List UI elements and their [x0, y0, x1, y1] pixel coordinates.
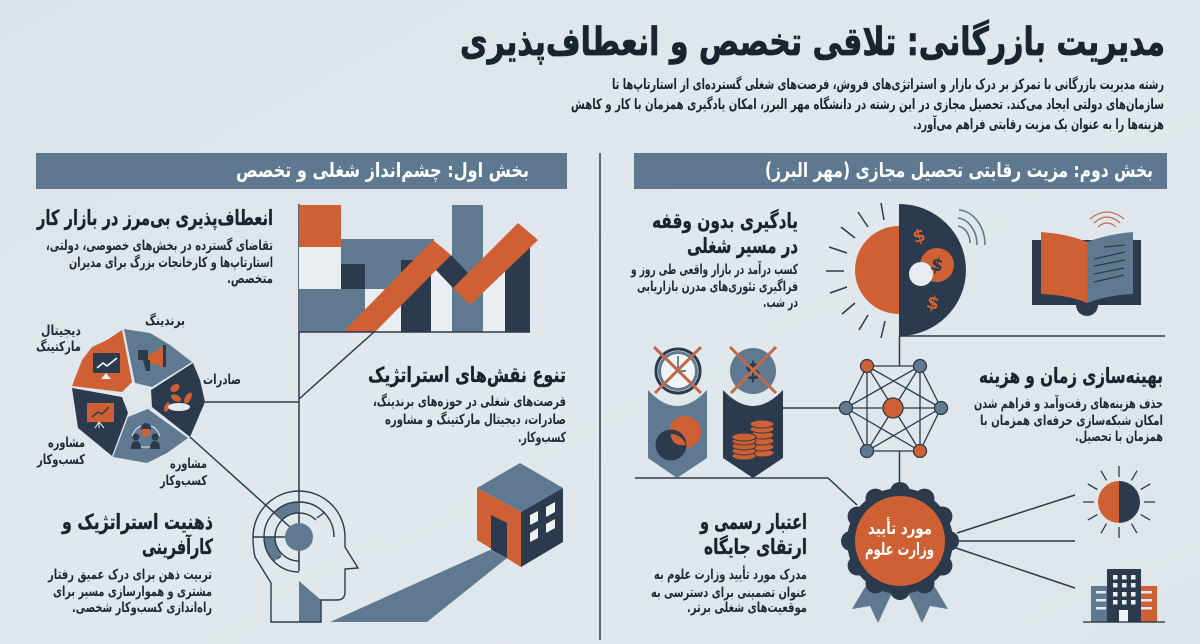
icon: half sun	[1083, 466, 1155, 538]
text block: strategic and entrepreneurial mindset: ذهنیت استراتژیک و	[61, 510, 213, 534]
segmented wheel of career roles	[36, 312, 241, 489]
text block: uninterrupted learning: در مسیر شغلی	[687, 234, 798, 258]
intro paragraph	[571, 75, 1164, 133]
text block: variety of strategic roles: کسب‌وکار.	[518, 430, 567, 446]
segment: business consulting team	[113, 409, 188, 463]
text block: uninterrupted learning: یادگیری بدون وقفه	[652, 208, 798, 233]
wheel labels	[36, 312, 241, 489]
wheel labels: مشاوره	[170, 456, 207, 472]
wheel labels: دیجیتال	[41, 323, 81, 339]
text block: flexibility in job market: متخصص.	[227, 271, 273, 287]
badge: approved by ministry of science: وزارت علوم	[865, 540, 934, 560]
segment: branding	[124, 329, 192, 387]
text block: official credit and status: عنوان تضمینی برای دسترسی به	[651, 585, 807, 601]
text block: variety of strategic roles: تنوع نقش‌های استراتژیک	[368, 363, 566, 387]
icon: crossed cost over coin shield: $	[745, 357, 761, 385]
icon: network graph	[840, 360, 948, 458]
icon: day and night sun with coins: $	[910, 225, 928, 248]
text block: flexibility in job market: انعطاف‌پذیری بی‌مرز در بازار کار	[36, 206, 273, 230]
text block: variety of strategic roles: صادرات، دیجیتال مارکتینگ و مشاوره	[385, 411, 566, 428]
icon: office buildings	[1083, 569, 1165, 622]
icon: crossed clock over venn shield	[648, 347, 707, 478]
text block: flexibility in job market	[36, 206, 273, 287]
text block: uninterrupted learning: فراگیری تئوری‌های مدرن بازاریابی	[637, 278, 798, 295]
text block: flexibility in job market: تقاضای گسترده در بخش‌های خصوصی، دولتی،	[46, 237, 273, 254]
text block: official credit and status: اعتبار رسمی و	[699, 510, 807, 534]
panel: part two, online study advantage	[630, 153, 1167, 623]
badge: approved by ministry of science	[841, 482, 959, 623]
text block: strategic and entrepreneurial mindset: تربیت ذهن برای درک عمیق رفتار	[47, 567, 212, 583]
icon: day and night sun with coins: $	[928, 254, 946, 277]
icon: day and night sun with coins: $	[924, 292, 942, 315]
connector lines: left panel	[190, 204, 374, 571]
text block: strategic and entrepreneurial mindset: کارآفرینی	[142, 534, 214, 559]
wheel labels: مارکتینگ	[36, 338, 81, 355]
connector lines: right panel	[635, 336, 1165, 588]
icon: crossed cost over coin shield	[723, 347, 783, 478]
section header: part one: بخش اول: چشم‌انداز شغلی و تخصص	[236, 158, 529, 183]
wheel labels: مشاوره	[48, 435, 85, 451]
bar chart with rising arrow	[299, 205, 538, 332]
wheel labels: کسب‌وکار	[159, 473, 207, 489]
panel: part one, career outlook	[36, 153, 567, 622]
text block: official credit and status: مدرک مورد تأیید وزارت علوم به	[654, 565, 807, 583]
section header: part one	[36, 153, 567, 189]
wheel labels: صادرات	[203, 372, 241, 388]
segment: export	[151, 363, 205, 437]
segment: business consulting board	[72, 388, 128, 456]
text block: strategic and entrepreneurial mindset: راه‌اندازی کسب‌وکار شخصی.	[72, 600, 212, 616]
icon: isometric building with path	[330, 463, 563, 622]
wheel labels: کسب‌وکار	[36, 452, 85, 468]
text block: official credit and status: ارتقای جایگاه	[704, 534, 807, 559]
icon: head with maze mind	[253, 491, 358, 622]
wheel labels: برندینگ	[145, 312, 185, 329]
text block: time and cost optimisation	[974, 364, 1163, 445]
text block: strategic and entrepreneurial mindset: مشتری و هموارسازی مسیر برای	[53, 584, 212, 600]
text block: official credit and status: موقعیت‌های شغلی برتر.	[687, 600, 807, 616]
text block: variety of strategic roles: فرصت‌های شغلی در حوزه‌های برندینگ،	[373, 393, 566, 410]
text block: uninterrupted learning: کسب درآمد در بازار واقعی طی روز و	[630, 260, 799, 278]
segment: digital marketing	[72, 330, 132, 392]
text block: uninterrupted learning: در شب.	[763, 295, 798, 311]
badge: approved by ministry of science: مورد تأیید	[868, 517, 932, 539]
text block: uninterrupted learning	[630, 208, 799, 311]
icon: day and night sun with coins	[826, 203, 985, 338]
text block: official credit and status	[651, 510, 807, 616]
icon: open book with signal	[1032, 212, 1141, 316]
text block: time and cost optimisation: همزمان با تحصیل.	[1075, 429, 1163, 445]
text block: variety of strategic roles	[368, 363, 567, 446]
text block: strategic and entrepreneurial mindset	[47, 510, 214, 616]
text block: flexibility in job market: استارتاپ‌ها و کارخانجات بزرگ برای مدیران	[69, 254, 273, 271]
section header: part two	[634, 153, 1167, 189]
